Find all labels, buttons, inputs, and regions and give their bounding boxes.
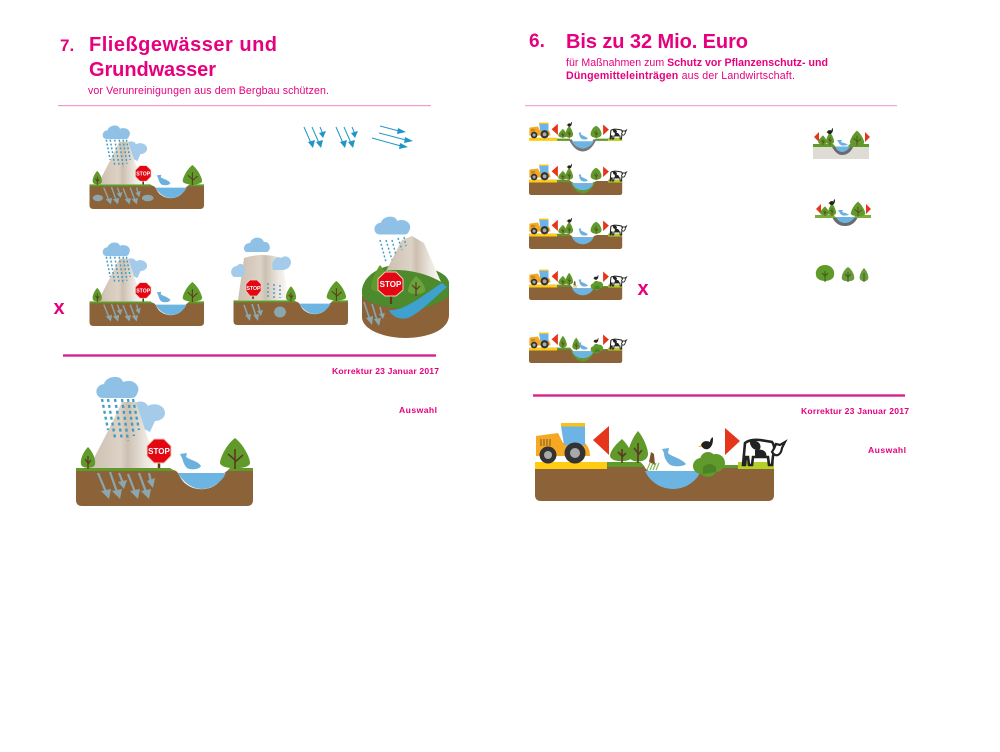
heading: section 7: 7. (60, 36, 74, 55)
subheading: section 6: Düngemitteleinträgen aus der Landwirtschaft. (566, 70, 795, 82)
mountain scene variant 1: STOP (136, 288, 151, 294)
marker x right: x (638, 278, 649, 300)
heading: section 6: Bis zu 32 Mio. Euro (566, 31, 748, 53)
selected farm scene (535, 423, 785, 501)
selected mountain scene: STOP (148, 447, 170, 456)
correction note right: Korrektur 23 Januar 2017 (801, 406, 909, 416)
farm scene row 1: strip only (529, 122, 626, 151)
correction note left: Korrektur 23 Januar 2017 (332, 366, 439, 376)
heading: section 7 (60, 34, 277, 81)
farm scene row 3 (529, 218, 626, 249)
selected mountain scene (76, 377, 253, 506)
farm scene row 4 (529, 270, 626, 300)
mountain scene variant 1 (90, 242, 204, 326)
mountain scene variant 3: round block (362, 217, 449, 338)
mountain scene variant 2: quarry: STOP (246, 286, 261, 292)
farm scene row 5 (529, 333, 626, 363)
subheading: section 6 (566, 57, 828, 82)
mountain scene variant 3: round block: STOP (380, 280, 402, 289)
farm scene row 2 (529, 164, 626, 195)
selection label right: Auswahl (868, 445, 906, 455)
detail: pond with green banks (815, 199, 871, 226)
mountain scene with groundwater blobs: STOP (136, 171, 151, 177)
mountain scene variant 2: quarry (231, 238, 348, 325)
arrows: blue downward sets (304, 126, 413, 149)
selection label left: Auswahl (399, 405, 437, 415)
heading: section 7: Grundwasser (89, 59, 216, 81)
mountain scene with groundwater blobs (90, 125, 204, 209)
marker x left: x (54, 297, 65, 319)
detail: pond on grey soil (813, 128, 870, 159)
heading: section 7: Fließgewässer und (89, 34, 277, 56)
subheading: section 7: vor Verunreinigungen aus dem Bergbau schützen. (88, 85, 329, 97)
detail: three tree types (816, 265, 868, 282)
heading: section 6: 6. (529, 31, 545, 52)
subheading: section 6: für Maßnahmen zum Schutz vor Pflanzenschutz- und (566, 57, 828, 69)
